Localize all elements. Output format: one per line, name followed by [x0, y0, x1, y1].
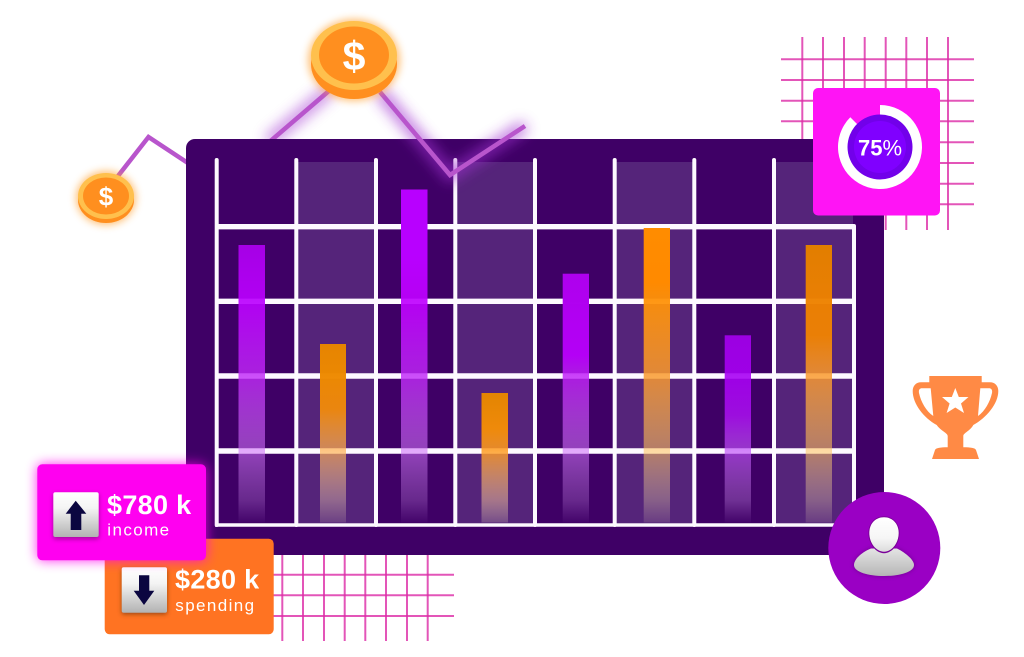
trend line: behind panel — [118, 90, 330, 176]
avatar head — [868, 516, 900, 553]
icon: large dollar coin — [308, 19, 400, 101]
spending arrow button — [122, 567, 167, 614]
trend line: in front of panel — [380, 92, 525, 175]
income label: income — [107, 521, 171, 540]
spending value: $280 k — [175, 564, 260, 594]
decorative grid: top right — [781, 37, 974, 230]
chart grid lines — [215, 160, 856, 525]
icon: small dollar coin — [76, 171, 136, 225]
income value: $780 k — [107, 490, 192, 520]
icon: large dollar coin: $ — [343, 33, 366, 79]
icon: trophy — [913, 376, 998, 459]
decorative grid: bottom — [261, 540, 454, 641]
percent label: 75% — [858, 136, 902, 160]
donut ring — [838, 105, 922, 189]
spending label: spending — [175, 596, 256, 615]
card: income — [37, 464, 206, 560]
trophy star — [942, 388, 968, 413]
card: spending — [105, 539, 274, 634]
avatar body — [854, 548, 914, 576]
progress card: 75% — [813, 88, 940, 216]
bar chart — [238, 190, 832, 522]
user avatar badge — [828, 492, 940, 604]
alternating column shading — [297, 162, 853, 523]
donut center — [848, 114, 912, 180]
income arrow button — [53, 492, 99, 539]
chart panel — [186, 139, 884, 555]
icon: small dollar coin: $ — [99, 182, 114, 212]
